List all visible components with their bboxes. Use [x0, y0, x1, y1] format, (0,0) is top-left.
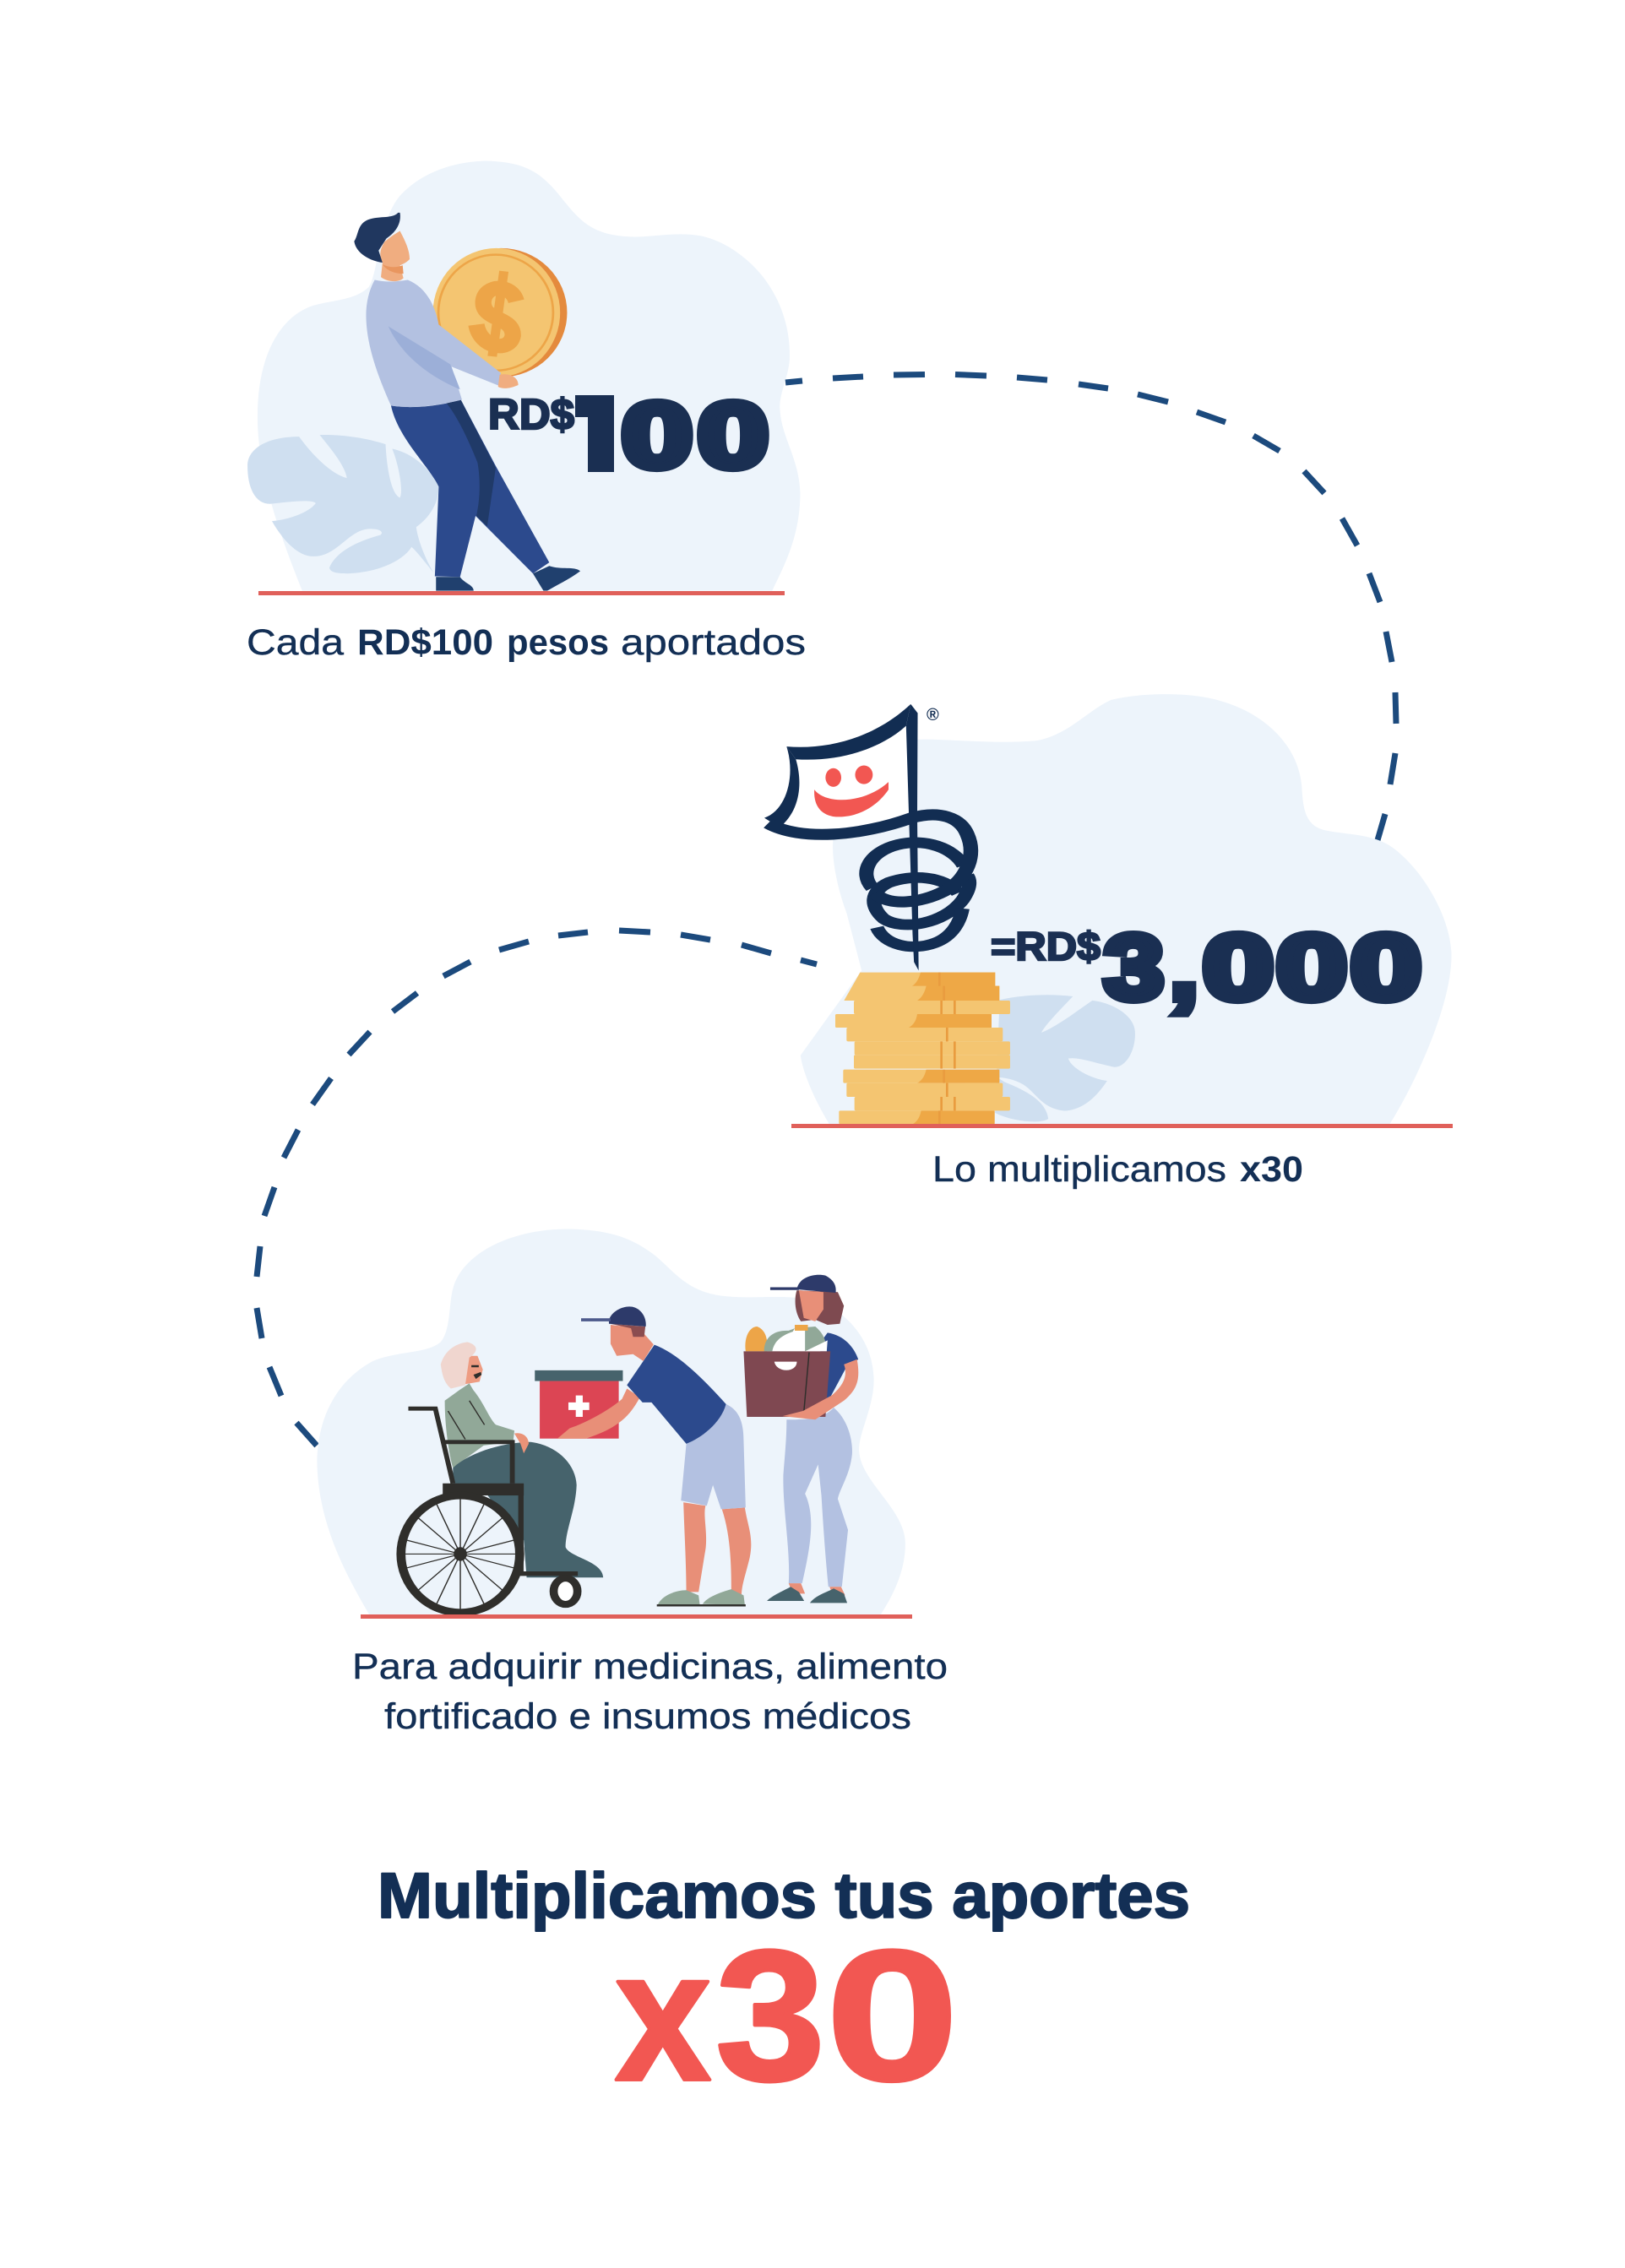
figure: delivery man	[557, 1306, 751, 1606]
arrow: dashed connector step 2 to step 3	[257, 931, 817, 1446]
amount: RD$100	[490, 395, 769, 473]
big number: x30: 3	[715, 1912, 825, 2119]
ground line	[258, 591, 785, 595]
amount: =RD$3,000	[991, 916, 1421, 1019]
background blob	[317, 1229, 905, 1614]
caption: step 1: pesos	[507, 622, 609, 663]
big number: x30	[615, 1912, 959, 2119]
monstera leaf	[995, 995, 1135, 1121]
caption: step 3: Para adquirir medicinas, alimento	[352, 1647, 948, 1687]
illustration: man carrying a coin	[247, 161, 800, 591]
caption: step 2: Lo multiplicamos	[932, 1149, 1226, 1190]
caption: step 1	[247, 622, 806, 663]
arrow: dashed connector step 1 to step 2	[785, 375, 1396, 840]
illustration: aid delivery to a patient	[317, 1229, 905, 1614]
monstera leaf	[247, 435, 438, 573]
amount: =RD$3,000: ,	[1170, 916, 1198, 1019]
amount: RD$100: 0	[622, 384, 693, 487]
illustration: logo, leaf and blob	[764, 694, 1452, 1124]
amount: RD$100: 0	[698, 384, 769, 487]
ground line	[361, 1614, 912, 1619]
panel: step 2 multiplication	[764, 694, 1453, 1190]
icon: medical box	[535, 1370, 622, 1439]
infographic canvas	[247, 160, 1453, 2084]
registered mark: ®	[927, 706, 939, 724]
panel: step 1 donation	[247, 161, 806, 663]
icon: gold coin	[433, 248, 567, 377]
caption: step 1: aportados	[621, 622, 806, 663]
amount: =RD$3,000: 0	[1276, 916, 1347, 1019]
caption: step 2: x30	[1240, 1149, 1303, 1190]
background blob	[258, 161, 800, 591]
amount: RD$100: 1	[574, 384, 614, 487]
figure: elderly woman	[441, 1342, 603, 1577]
background blob	[801, 694, 1452, 1124]
amount: =RD$3,000: 0	[1203, 916, 1274, 1019]
big number: x30: x	[615, 1912, 711, 2119]
amount: =RD$3,000: 0	[1351, 916, 1421, 1019]
caption: step 3: fortificado e insumos médicos	[384, 1696, 911, 1737]
caption: step 1: Cada	[247, 622, 344, 663]
figure: delivery woman with groceries	[743, 1275, 858, 1603]
caption: step 3	[352, 1647, 948, 1737]
ground line	[791, 1124, 1453, 1128]
icon: wheelchair	[401, 1408, 578, 1613]
amount: =RD$3,000: =RD$	[991, 924, 1101, 969]
icon: smiling flag logo	[764, 704, 970, 970]
amount: RD$100: RD$	[488, 390, 574, 438]
heading: closing title: Multiplicamos tus aportes	[378, 1860, 1190, 1932]
icon: stack of coins	[835, 973, 1010, 1124]
big number: x30: 0	[826, 1912, 959, 2119]
panel: step 3 aid delivery	[317, 1229, 948, 1737]
caption: step 1: RD$100	[357, 622, 493, 663]
amount: =RD$3,000: 3	[1104, 916, 1164, 1019]
figure: man	[354, 213, 580, 591]
